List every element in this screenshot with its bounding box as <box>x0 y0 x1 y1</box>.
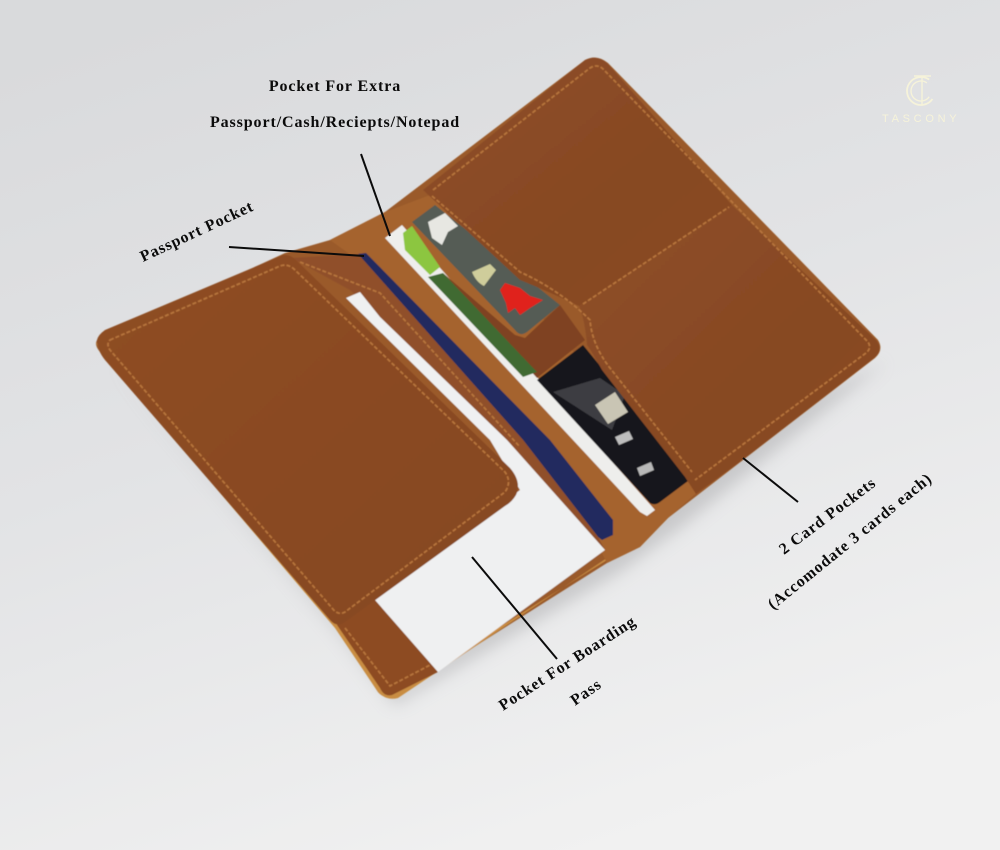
wallet shadow <box>110 360 885 705</box>
logo wordmark: TASCONY <box>882 113 960 125</box>
callout: extra pocket: Pocket For Extra <box>269 78 401 95</box>
strip stitching <box>300 262 520 447</box>
callout: boarding pass: Pass <box>568 676 605 709</box>
callout: card pockets: 2 Card Pockets <box>776 474 880 558</box>
callout: passport pocket <box>138 198 364 266</box>
black credit card <box>537 345 692 504</box>
strip leather <box>292 254 605 550</box>
orange lower edge rim <box>96 342 640 699</box>
callout: extra pocket: Passport/Cash/Reciepts/Notepad <box>210 114 460 131</box>
callout: card pockets: (Accomodate 3 cards each) <box>765 470 936 613</box>
pocket stitching <box>433 66 870 480</box>
interior spine leather <box>330 195 700 563</box>
lower left pocket stitching <box>345 628 432 686</box>
callout: boarding pass <box>472 557 639 714</box>
lower left pocket <box>337 600 438 695</box>
inner brown fold <box>443 273 585 378</box>
passport <box>358 253 613 540</box>
logo <box>882 72 960 125</box>
callout: boarding pass: Pocket For Boarding <box>496 613 639 714</box>
card with maple leaf <box>412 205 560 334</box>
callout: passport pocket: Passport Pocket <box>138 198 256 266</box>
wallet <box>96 58 880 699</box>
lower right pocket <box>579 205 880 494</box>
front left panel stitching <box>108 265 508 613</box>
insert green block <box>403 226 440 275</box>
back cover <box>96 58 880 697</box>
upper right pocket <box>423 58 732 306</box>
callout: extra pocket <box>210 78 460 236</box>
white insert <box>385 225 655 516</box>
front left panel <box>97 255 518 625</box>
insert photo <box>428 273 537 377</box>
boarding pass sheet <box>346 292 605 672</box>
